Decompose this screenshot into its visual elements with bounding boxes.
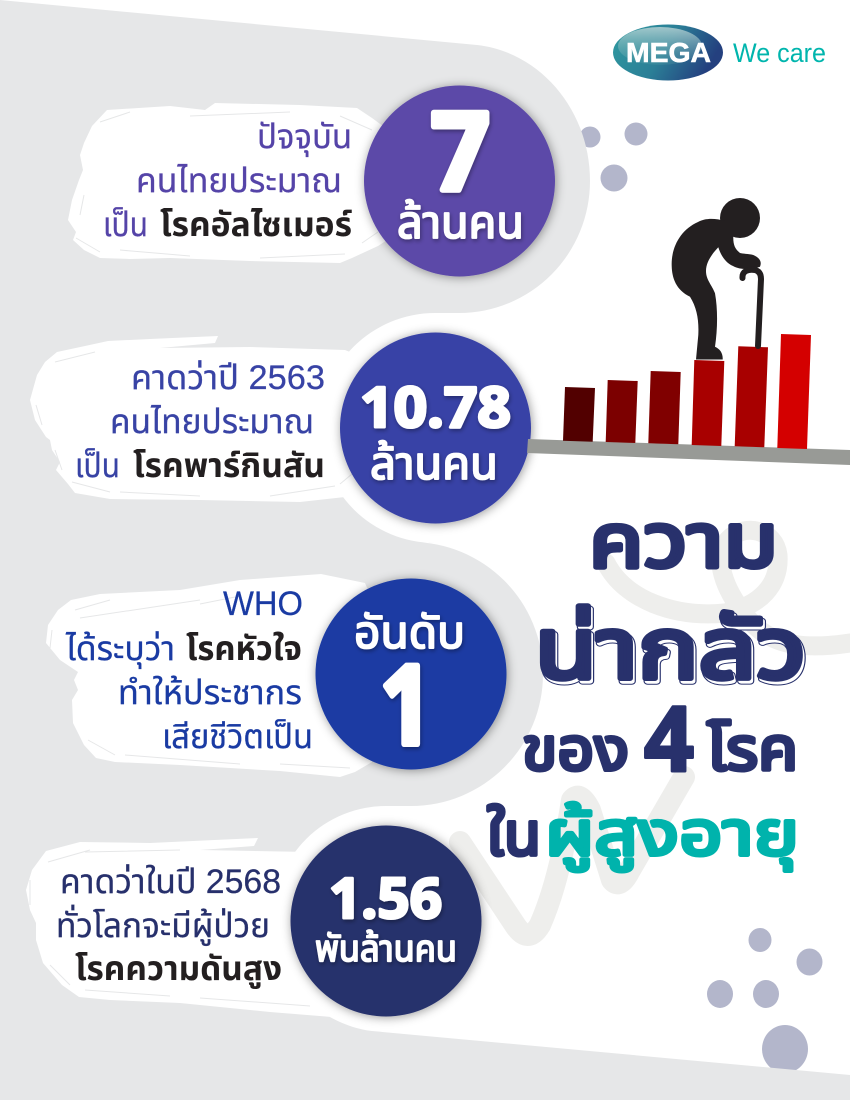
text block 2: คาดว่าปี 2563 [131,359,325,397]
decorative swirl behind title [460,530,850,935]
title line: น่ากลัว with offset outline: น่ากลัว [535,602,806,697]
circle 4 [290,826,482,1016]
text block 1: เป็น [103,206,148,244]
circle 1 [364,75,555,276]
title [487,499,808,872]
text block 3: ได้ระบุว่า [65,630,175,669]
circle 3 [316,578,506,794]
title line: น่ากลัว with offset outline: น่ากลัว [537,605,808,700]
unit: พันล้านคน: พันล้านคน [315,928,457,969]
text block 1: โรคอัลไซเมอร์ [160,206,352,244]
title line: ใน: ใน [487,801,541,868]
title highlight: ผู้สูงอายุ: ผู้สูงอายุ [545,800,799,872]
text block 1: ปัจจุบัน [257,118,352,157]
number 7: 7 [431,75,490,239]
label: อันดับ: อันดับ [354,606,465,658]
circle 2 [340,332,531,524]
dots: bottom cluster [707,928,822,1073]
unit: ล้านคน: ล้านคน [370,437,498,489]
text block 3 [65,585,313,756]
title line: ของ: ของ [522,716,629,783]
title line: ความ: ความ [589,499,778,583]
text block 3: ทำให้ประชากร [118,674,302,712]
number 10.78: 10.78 [360,369,511,453]
text block 4: ทั่วโลกจะมีผู้ป่วย [56,904,270,946]
brush panel 1 [68,103,395,263]
text block 3: เสียชีวิตเป็น [162,718,313,756]
dots: top cluster [580,122,648,192]
text block 2 [75,359,325,485]
number 1: 1 [380,627,432,794]
text block 4: โรคความดันสูง [75,950,282,989]
number 1.56: 1.56 [329,860,442,944]
title line: โรค: โรค [707,716,798,783]
brush panel 3 [46,574,372,777]
logo: MEGA We care [613,24,826,80]
text block 4 [56,863,282,989]
icon: elderly person with cane [672,198,761,360]
text block 3: WHO [223,585,303,623]
brush panel 4 [26,838,332,1017]
brush panel 2 [30,336,370,502]
text block 1 [103,118,352,244]
text block 2: เป็น [75,447,120,485]
text block 3: โรคหัวใจ [186,630,302,668]
title number 4: 4 [644,676,694,812]
logo tagline: We care [733,38,826,68]
text block 4: คาดว่าในปี 2568 [60,863,281,901]
logo wordmark: MEGA [626,37,711,68]
illustration: platform and rising bars [527,334,850,465]
text block 1: คนไทยประมาณ [136,162,342,200]
text block 2: คนไทยประมาณ [110,403,314,441]
text block 2: โรคพาร์กินสัน [133,447,325,485]
unit: ล้านคน: ล้านคน [397,196,524,248]
title line: น่ากลัว with offset outline: น่ากลัว [537,605,808,700]
